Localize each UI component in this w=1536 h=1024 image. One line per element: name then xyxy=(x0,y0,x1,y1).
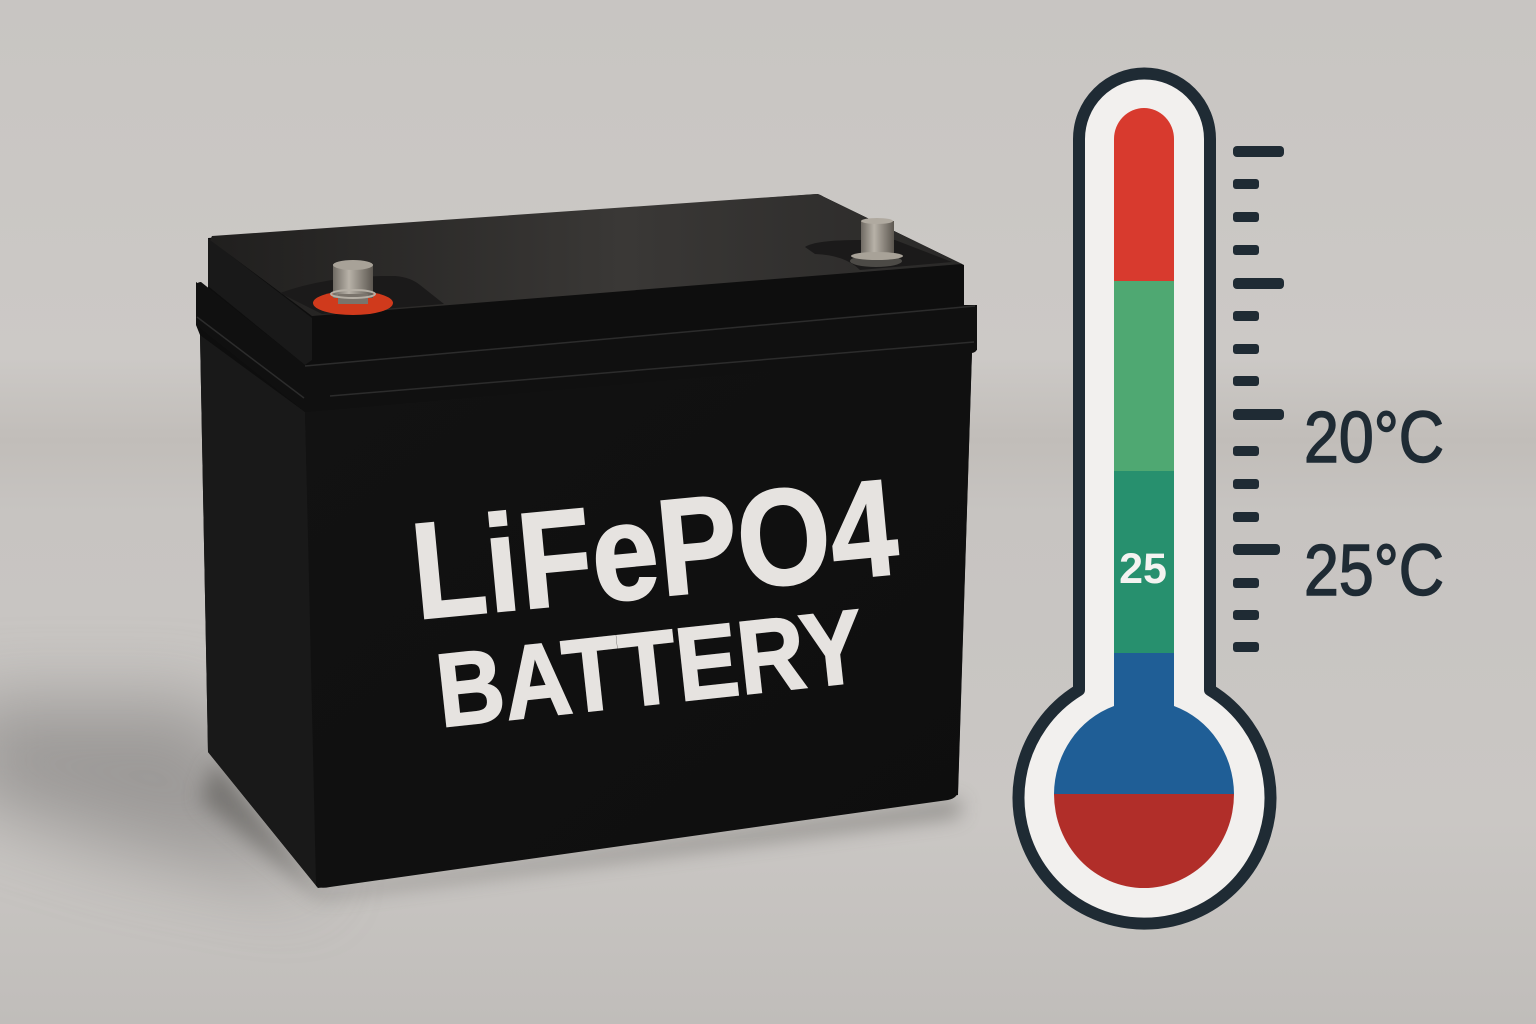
temperature scale ticks xyxy=(1233,146,1284,652)
battery label: BATTERY: BATTERY xyxy=(431,588,869,750)
blue column and bulb xyxy=(1054,653,1234,794)
left terminal recess xyxy=(280,276,444,314)
battery xyxy=(196,194,977,888)
thermometer casing xyxy=(1018,73,1271,924)
lid top surface xyxy=(210,194,962,316)
thermometer xyxy=(1018,73,1271,924)
red bulb segment xyxy=(1054,794,1234,888)
battery lower flange xyxy=(196,282,977,412)
label: 20°C: 20°C xyxy=(1304,398,1444,478)
battery cast shadow xyxy=(0,700,960,897)
label: 25°C: 25°C xyxy=(1304,531,1444,611)
red segment xyxy=(1114,108,1174,281)
battery body left face xyxy=(200,335,318,888)
left terminal xyxy=(313,260,393,315)
flange grooves xyxy=(197,306,975,398)
dark green segment xyxy=(1114,471,1174,653)
lid front band xyxy=(312,265,964,361)
lid left side xyxy=(208,238,312,365)
battery label: LiFePO4: LiFePO4 xyxy=(405,451,904,649)
column value: 25 xyxy=(1119,545,1167,593)
light green segment xyxy=(1114,281,1174,471)
battery silhouette backing xyxy=(196,194,977,888)
right terminal xyxy=(850,218,903,267)
battery body front face xyxy=(305,350,972,888)
right terminal recess xyxy=(805,240,952,270)
